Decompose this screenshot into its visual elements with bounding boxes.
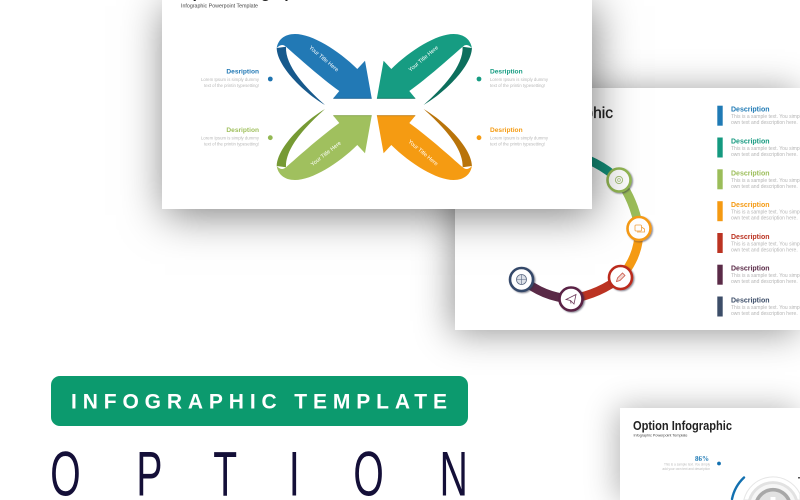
legend item: navy <box>717 296 800 317</box>
arrow: blue, top left <box>277 34 372 105</box>
slide subtitle: Infographic Powerpoint Template <box>181 4 258 10</box>
legend item: orange: Description <box>731 202 770 209</box>
panel: timeline infographic slide, middle right <box>455 88 800 330</box>
legend item: teal <box>717 138 800 158</box>
banner: infographic template: INFOGRAPHIC TEMPLATE <box>71 390 447 413</box>
slide subtitle: Infographic Powerpoint Template <box>634 434 688 438</box>
arrow: green, bottom left <box>277 109 372 180</box>
legend item: navy: own text and description here. <box>731 311 798 317</box>
legend item: blue: own text and description here. <box>731 120 798 126</box>
arrow: green, bottom left: Your Title Here <box>310 141 343 168</box>
legend item: orange: own text and description here. <box>731 216 798 222</box>
node: settings icon <box>608 168 630 192</box>
description: orange: Desription <box>490 127 523 134</box>
arrow: blue, top left: Your Title Here <box>307 45 339 73</box>
description: blue: text of the printin typesetting! <box>204 83 259 88</box>
percentage callout <box>662 455 721 471</box>
arrow: orange, bottom right <box>377 109 472 180</box>
arrow: teal, top right <box>377 34 472 105</box>
legend item: red: own text and description here. <box>731 248 798 254</box>
legend item: orange <box>717 201 800 222</box>
description: green: Desription <box>226 127 259 134</box>
description: blue: Lorem Ipsum is simply dummy <box>201 77 260 82</box>
description: green: Lorem Ipsum is simply dummy <box>201 136 260 140</box>
description: teal: text of the printin typesetting! <box>490 83 545 88</box>
slide title: Option Infographic <box>486 105 613 122</box>
description: teal: Desription <box>490 68 523 76</box>
node: globe icon <box>510 268 533 291</box>
legend item: plum: own text and description here. <box>731 279 798 285</box>
description: orange <box>477 127 549 146</box>
legend item: teal: own text and description here. <box>731 152 798 158</box>
description: green: text of the printin typesetting! <box>204 142 259 146</box>
legend item: navy: Description <box>731 298 770 304</box>
legend item: blue: Description <box>731 106 770 114</box>
legend item: plum: Description <box>731 266 770 273</box>
description: orange: text of the printin typesetting! <box>490 142 545 146</box>
legend item: plum <box>717 265 800 285</box>
legend item: green: Description <box>731 170 770 177</box>
node: pencil icon <box>609 266 632 289</box>
arrow: teal, top right: Your Title Here <box>408 45 440 73</box>
banner: infographic template <box>51 376 468 426</box>
percentage callout: add your own text and description <box>662 467 710 471</box>
legend item: teal: Description <box>731 138 770 146</box>
arrow: orange, bottom right: Your Title Here <box>407 139 439 167</box>
node: truck icon <box>628 217 650 240</box>
legend item: red <box>717 233 800 254</box>
percentage callout: This is a sample text. You simply <box>664 462 710 466</box>
description: blue <box>201 68 273 88</box>
legend item: red: Description <box>731 234 770 241</box>
description: orange: Lorem Ipsum is simply dummy <box>490 136 549 140</box>
circular chart <box>732 477 800 500</box>
description: blue: Desription <box>226 68 259 76</box>
legend item: green: own text and description here. <box>731 184 798 190</box>
panel: four arrows slide, top <box>162 0 592 209</box>
legend item: blue <box>717 106 800 126</box>
percentage callout: 86% <box>695 455 709 463</box>
description: teal <box>477 68 549 88</box>
legend item: green <box>717 169 800 190</box>
description: green <box>201 127 273 146</box>
slide title: Option Infographic <box>633 419 732 433</box>
panel: option infographic slide, bottom right <box>620 408 800 500</box>
curved timeline <box>522 152 639 299</box>
node: paper plane icon <box>560 288 582 310</box>
description: teal: Lorem Ipsum is simply dummy <box>490 77 549 82</box>
